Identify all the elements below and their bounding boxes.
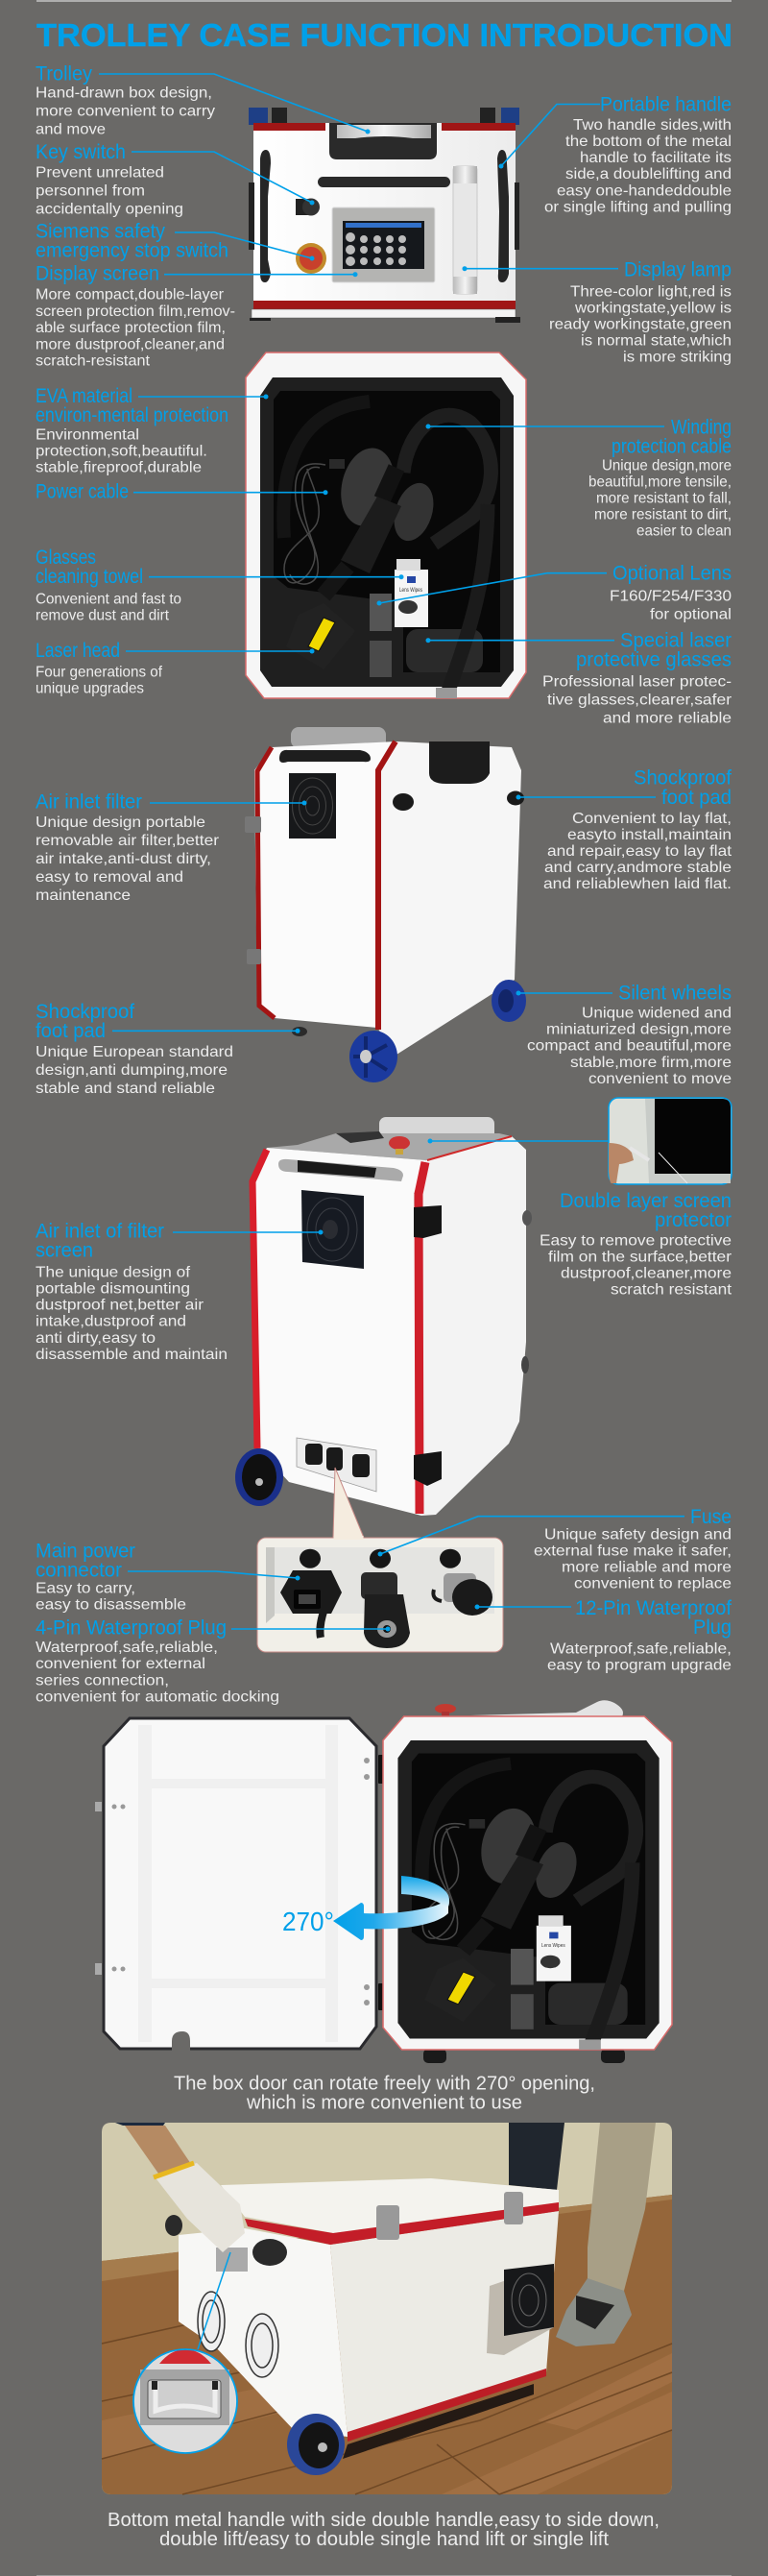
text: air inlet of filter screen: disassemble and maintain (36, 1347, 228, 1363)
text: air inlet filter (36, 790, 220, 904)
text: 12-pin waterproof plug: Plug (693, 1616, 732, 1639)
text: shockproof foot pad left: design,anti dumping,more (36, 1062, 228, 1079)
text: emergency stop (36, 220, 228, 262)
text: 4-pin waterproof plug: series connection, (36, 1672, 169, 1689)
leader lines: interior (126, 394, 664, 653)
text: winding cable: Winding (671, 416, 732, 438)
text: double layer protector: dustproof,cleaner,more (561, 1265, 732, 1281)
caption: bottom metal handle: Bottom metal handle with side double handle,easy to side down, (108, 2510, 660, 2531)
caption: bottom metal handle (108, 2510, 660, 2550)
text: air inlet filter: removable air filter,better (36, 833, 220, 849)
icon: fuses (300, 1549, 461, 1568)
inset: bottom metal handle (133, 2349, 237, 2453)
photo: lifting the case (102, 2123, 672, 2494)
text: key switch (36, 141, 183, 218)
text: double layer protector: scratch resistant (611, 1281, 732, 1298)
icon: filter fan (301, 1190, 364, 1269)
text: shockproof foot pad right: Shockproof (634, 767, 732, 790)
icon: three-colour lamp (453, 166, 477, 294)
text: winding cable: protection cable (612, 435, 732, 457)
text: air inlet filter: air intake,anti-dust dirty, (36, 851, 211, 867)
text: trolley: more convenient to carry (36, 104, 215, 120)
text: fuse: convenient to replace (574, 1576, 732, 1592)
text: 4-pin waterproof plug: convenient for external (36, 1656, 205, 1672)
text: EVA material (36, 385, 228, 475)
text: portable handle: Portable handle (600, 93, 732, 115)
text: emergency stop: Siemens safety (36, 220, 165, 242)
text: display lamp: Three-color light,red is (570, 283, 732, 300)
leader lines: connectors (128, 1517, 684, 1631)
text: air inlet of filter screen: portable dismounting (36, 1281, 190, 1298)
text: portable handle: easy one-handeddouble (557, 182, 732, 199)
text: display screen: scratch-resistant (36, 352, 151, 369)
arrow: 270 degree rotation (333, 1876, 449, 1940)
text: display screen: Display screen (36, 263, 159, 285)
text: cleaning towel: cleaning towel (36, 566, 143, 588)
text: shockproof foot pad right: foot pad (661, 787, 732, 809)
text: laser head: Laser head (36, 640, 120, 662)
text: shockproof foot pad left (36, 1001, 233, 1097)
panel: machine rear view (245, 727, 526, 1082)
text: protective glasses: Professional laser protec- (542, 674, 732, 691)
icon: top corner bumpers (249, 108, 519, 125)
text: shockproof foot pad right: and repair,easy to lay flat (547, 843, 732, 860)
icon: 4-pin plug (320, 1572, 410, 1648)
text: silent wheels: compact and beautiful,more (527, 1038, 732, 1055)
text: 12-pin waterproof plug (547, 1597, 732, 1674)
text: shockproof foot pad left: Shockproof (36, 1001, 134, 1023)
text: main power connector: connector (36, 1559, 122, 1581)
text: shockproof foot pad right: easyto install,maintain (567, 827, 732, 843)
text: display lamp: is more striking (623, 350, 732, 366)
text: winding cable: easier to clean (636, 523, 732, 540)
text: optional lens (610, 563, 732, 623)
text: EVA material: protection,soft,beautiful. (36, 443, 207, 459)
text: emergency stop: emergency stop switch (36, 240, 228, 262)
photo inset: screen film (609, 1098, 732, 1184)
text: cleaning towel: Convenient and fast to (36, 592, 181, 608)
text: display lamp: workingstate,yellow is (574, 300, 732, 316)
panel: machine front-side view (235, 1098, 732, 1516)
text: shockproof foot pad left: stable and stand reliable (36, 1081, 215, 1097)
text: air inlet filter: Air inlet filter (36, 790, 142, 813)
text: silent wheels: convenient to move (588, 1071, 732, 1087)
panel: machine top view (249, 108, 520, 323)
text: trolley: and move (36, 121, 106, 137)
icon: top handle (329, 123, 437, 159)
text: main power connector: Main power (36, 1540, 135, 1562)
text: silent wheels: Silent wheels (618, 982, 732, 1004)
text: trolley (36, 62, 215, 137)
text: display screen: more dustproof,cleaner,and (36, 336, 225, 352)
text: winding cable (588, 416, 732, 540)
icon: photo wheel (287, 2414, 345, 2475)
text: silent wheels: stable,more firm,more (570, 1055, 732, 1071)
case body (165, 2178, 559, 2475)
text: EVA material: Environmental (36, 426, 139, 443)
icon: side grips (260, 150, 509, 282)
icon: main power connector (280, 1570, 342, 1614)
text: trolley: Trolley (36, 62, 92, 85)
panel: connector close-up callout (257, 1468, 503, 1652)
bottom rule (36, 2575, 732, 2576)
text: cleaning towel: remove dust and dirt (36, 608, 170, 624)
text: cleaning towel (36, 547, 181, 624)
text: fuse: more reliable and more (562, 1560, 732, 1576)
text: silent wheels (527, 982, 732, 1087)
caption: door opening (174, 2073, 595, 2113)
text: 4-pin waterproof plug: convenient for automatic docking (36, 1689, 279, 1705)
text: display lamp: is normal state,which (581, 332, 732, 349)
text: shockproof foot pad left: foot pad (36, 1020, 106, 1042)
text: 270 degrees: 270° (282, 1907, 334, 1936)
icon: key switch (296, 198, 320, 215)
text: protective glasses: and more reliable (603, 710, 732, 726)
icon: connector panel on machine (297, 1438, 376, 1492)
text: protective glasses: tive glasses,clearer,safer (547, 692, 732, 708)
text: power cable: Power cable (36, 480, 129, 502)
icon: 12-pin plug (433, 1573, 492, 1616)
text: optional lens: F160/F254/F330 (610, 589, 732, 605)
text: silent wheels: miniaturized design,more (546, 1022, 732, 1038)
text: 4-pin waterproof plug: Waterproof,safe,reliable, (36, 1640, 218, 1656)
icon: emergency stop (296, 243, 326, 274)
leader lines: top view (99, 74, 618, 277)
text: portable handle: or single lifting and pulling (544, 200, 732, 216)
text: 12-pin waterproof plug: easy to program upgrade (547, 1658, 732, 1674)
text: silent wheels: Unique widened and (582, 1006, 732, 1022)
text: portable handle: handle to facilitate its (580, 150, 732, 166)
text: main power connector: Easy to carry, (36, 1581, 135, 1597)
text: optional lens: for optional (650, 607, 732, 623)
text: winding cable: more resistant to dirt, (594, 507, 732, 523)
text: fuse: Fuse (690, 1506, 732, 1528)
text: key switch: personnel from (36, 182, 145, 199)
text: air inlet filter: easy to removal and (36, 869, 183, 886)
text: EVA material: environ-mental protection (36, 404, 228, 426)
person legs (509, 2123, 656, 2346)
text: laser head: Four generations of (36, 664, 163, 680)
icon: side carry handle (278, 1159, 403, 1181)
text: portable handle (544, 93, 732, 216)
text: air inlet of filter screen: screen (36, 1240, 93, 1262)
caption: door opening: The box door can rotate freely with 270° opening, (174, 2073, 595, 2094)
text: trolley: Hand-drawn box design, (36, 85, 212, 102)
text: laser head: unique upgrades (36, 680, 144, 696)
text: shockproof foot pad right: and carry,andmore stable (544, 860, 732, 876)
text: key switch: Prevent unrelated (36, 164, 164, 181)
text: display screen: More compact,double-layer (36, 287, 225, 304)
title: TROLLEY CASE FUNCTION INTRODUCTION (36, 17, 732, 53)
text: key switch: accidentally opening (36, 202, 183, 218)
text: air inlet of filter screen: anti dirty,easy to (36, 1330, 156, 1347)
text: display screen (36, 263, 235, 369)
icon: front wheel (235, 1448, 283, 1506)
text: 4-pin waterproof plug (36, 1616, 279, 1705)
callout line (198, 2252, 230, 2349)
text: shockproof foot pad right: and reliablewhen laid flat. (543, 876, 732, 892)
text: air inlet filter: maintenance (36, 887, 131, 904)
text: double layer protector: film on the surface,better (548, 1249, 732, 1265)
text: fuse (534, 1506, 732, 1592)
text: air inlet of filter screen (36, 1221, 228, 1363)
text: shockproof foot pad right (543, 767, 732, 892)
text: double layer protector (540, 1190, 732, 1298)
text: display lamp (549, 258, 732, 366)
text: double layer protector: Easy to remove protective (540, 1232, 732, 1249)
text: EVA material: EVA material (36, 385, 132, 407)
text: winding cable: more resistant to fall, (596, 491, 732, 507)
icon: air filter (289, 773, 336, 838)
text: main power connector: easy to disassemble (36, 1597, 186, 1614)
icon: display panel (332, 207, 435, 282)
text: EVA material: stable,fireproof,durable (36, 459, 202, 475)
text: display lamp: Display lamp (624, 258, 732, 280)
text: laser head (36, 640, 163, 696)
door (95, 1718, 376, 2051)
text: 4-pin waterproof plug: 4-Pin Waterproof Plug (36, 1616, 227, 1639)
icon: rear wheels (349, 980, 526, 1082)
text: air inlet of filter screen: intake,dustproof and (36, 1314, 186, 1330)
text: protective glasses: Special laser (620, 629, 732, 651)
text: cleaning towel: Glasses (36, 547, 96, 569)
text: air inlet filter: Unique design portable (36, 814, 205, 831)
text: key switch: Key switch (36, 141, 126, 163)
caption: bottom metal handle: double lift/easy to double single hand lift or single lift (159, 2529, 609, 2550)
text: air inlet of filter screen: Air inlet of filter (36, 1221, 164, 1243)
text: portable handle: Two handle sides,with (573, 117, 732, 134)
text: 12-pin waterproof plug: 12-Pin Waterproof (575, 1597, 732, 1619)
caption: door opening: which is more convenient to use (246, 2092, 522, 2113)
case interior (383, 1716, 672, 2050)
text: air inlet of filter screen: dustproof net,better air (36, 1298, 204, 1314)
text: protective glasses (542, 629, 732, 726)
text: winding cable: Unique design,more (602, 458, 732, 474)
hinges (378, 1755, 392, 2010)
leader lines: rear view (112, 795, 656, 1033)
panel: open case interior (246, 352, 526, 698)
text: display screen: able surface protection film, (36, 320, 226, 336)
panel: open door view (95, 1700, 672, 2063)
text: protective glasses: protective glasses (576, 648, 732, 670)
text: shockproof foot pad left: Unique European standard (36, 1044, 233, 1060)
text: 12-pin waterproof plug: Waterproof,safe,reliable, (550, 1641, 732, 1658)
text: display lamp: ready workingstate,green (549, 316, 732, 332)
text: optional lens: Optional Lens (612, 563, 732, 585)
arm and glove (115, 2123, 245, 2252)
text: display screen: screen protection film,remov- (36, 304, 235, 320)
top rule (36, 0, 732, 2)
text: winding cable: beautiful,more tensile, (588, 474, 732, 491)
text: portable handle: side,a doublelifting and (565, 166, 732, 182)
text: double layer protector: protector (655, 1209, 732, 1231)
text: fuse: Unique safety design and (544, 1526, 732, 1543)
text: air inlet of filter screen: The unique design of (36, 1265, 191, 1281)
text: fuse: external fuse make it safer, (534, 1543, 732, 1559)
text: double layer protector: Double layer screen (560, 1190, 732, 1212)
text: portable handle: the bottom of the metal (565, 134, 732, 150)
text: main power connector (36, 1540, 186, 1614)
text: shockproof foot pad right: Convenient to lay flat, (572, 811, 732, 827)
leader lines: front view (173, 1139, 609, 1235)
